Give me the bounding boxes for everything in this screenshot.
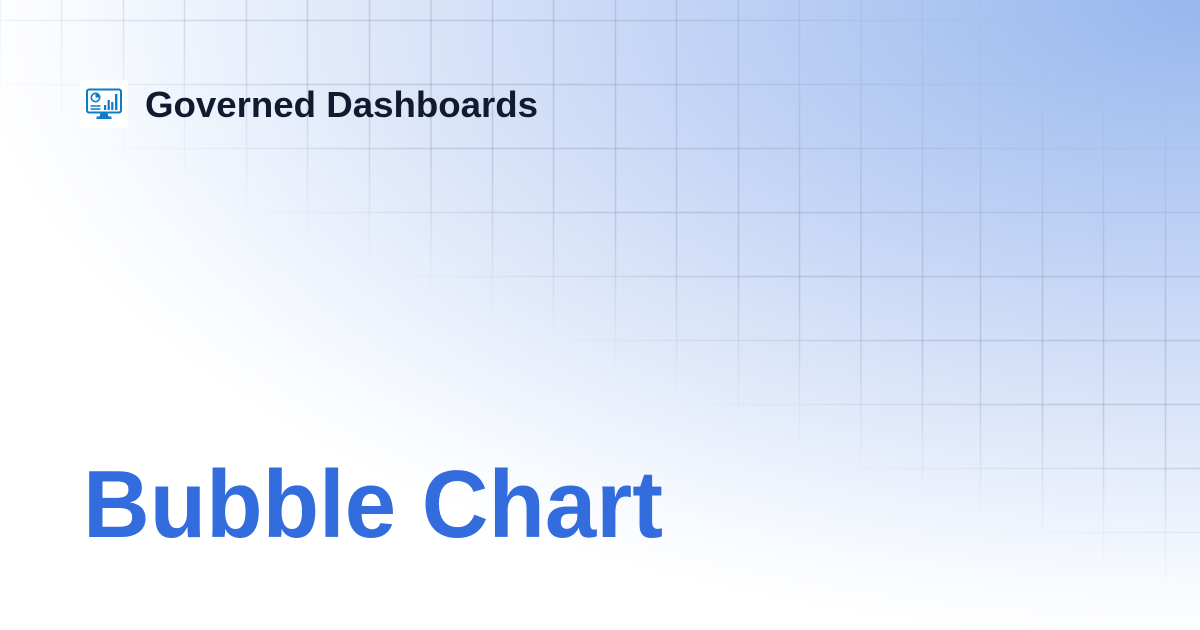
title: Bubble Chart xyxy=(83,451,663,558)
brand name: Governed Dashboards xyxy=(145,84,538,125)
icon: dashboard monitor xyxy=(80,80,128,128)
